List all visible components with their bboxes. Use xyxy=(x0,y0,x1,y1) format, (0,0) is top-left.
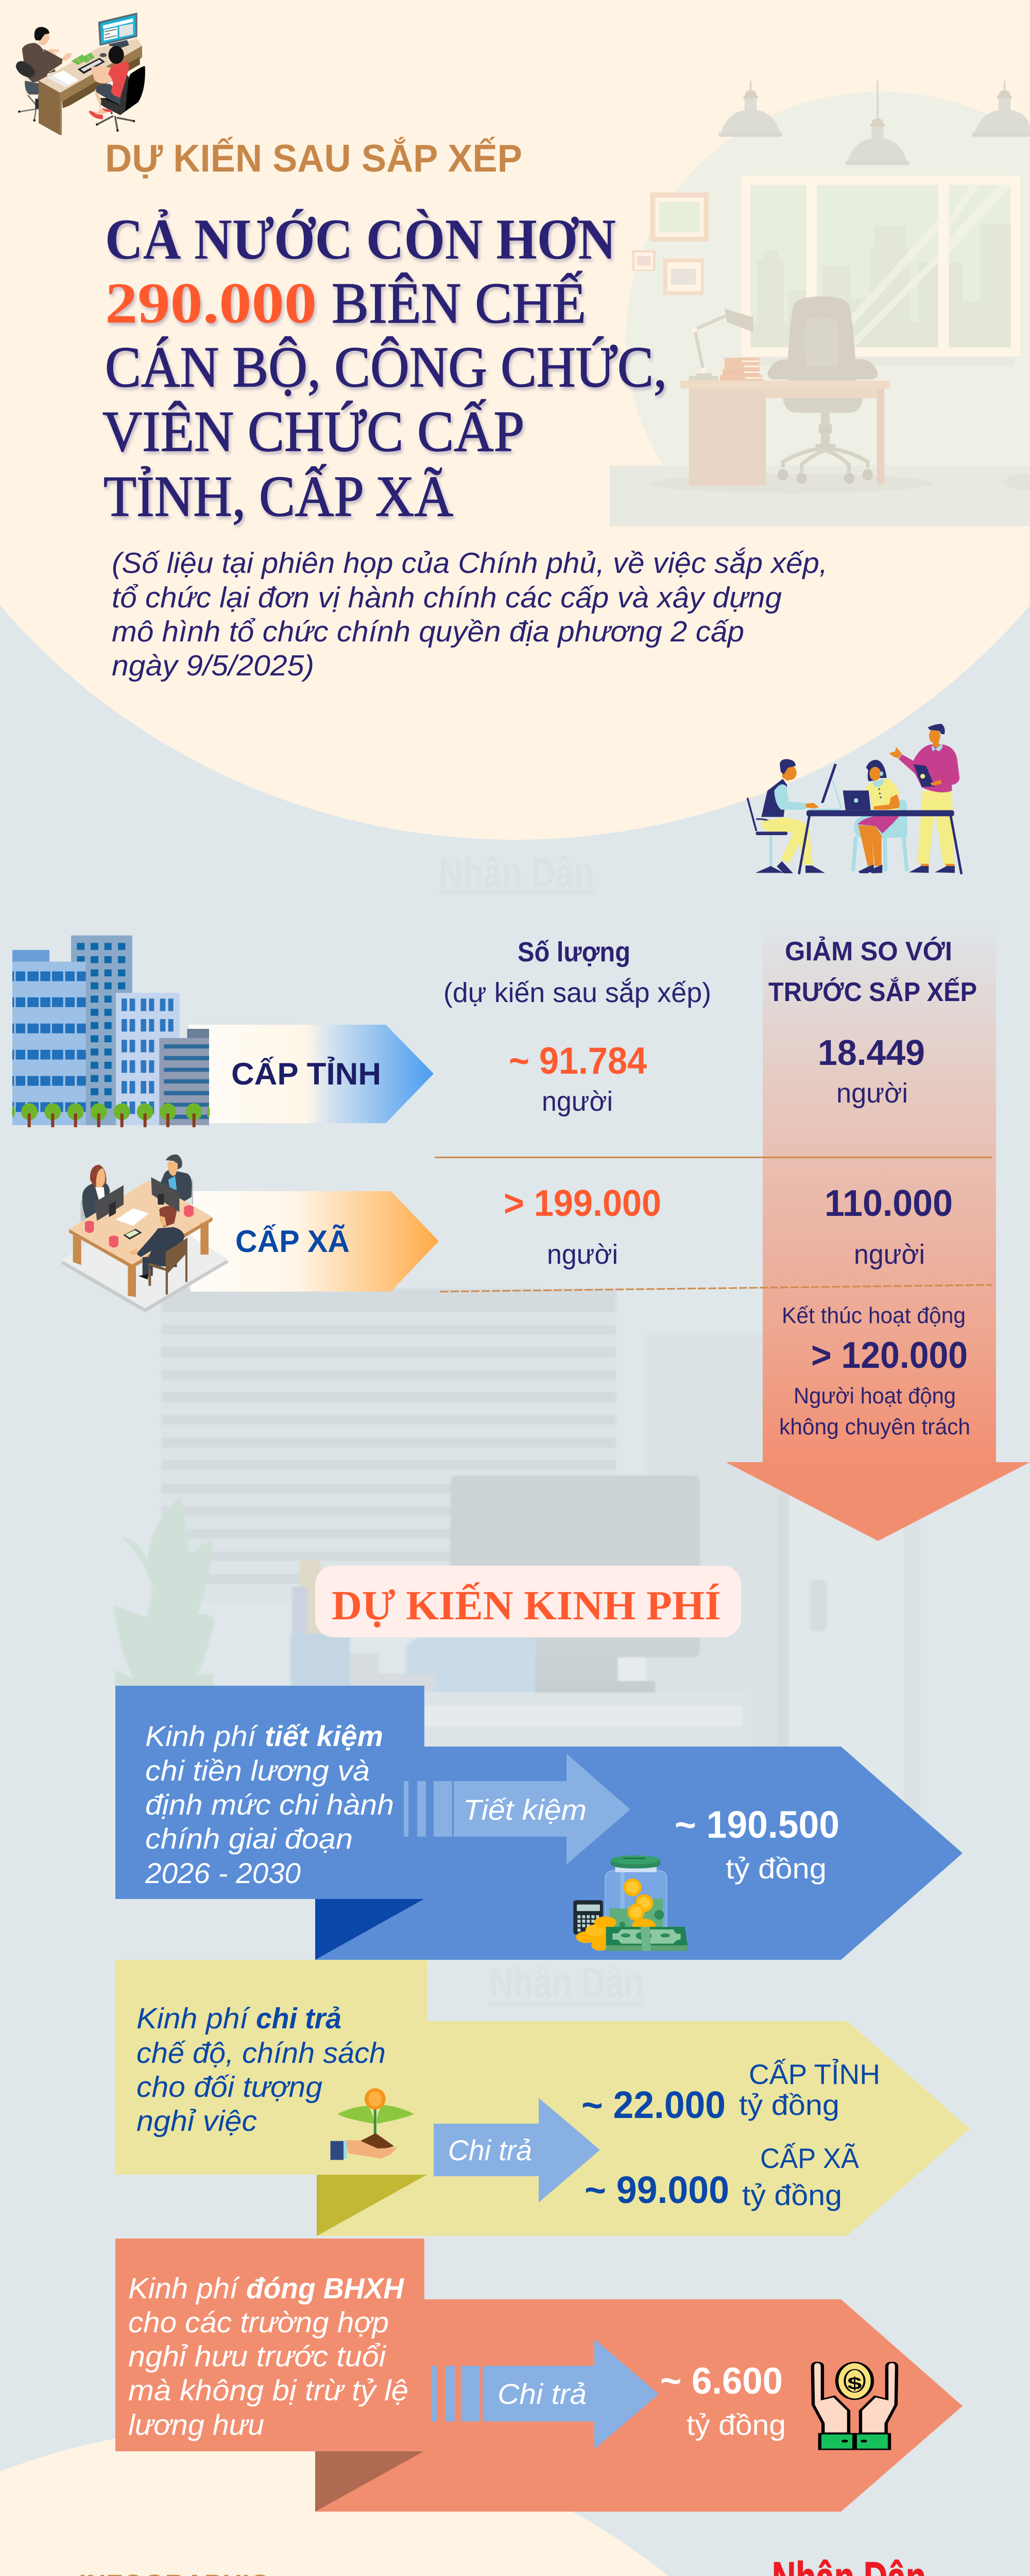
column header: decrease: TRƯỚC SẮP XẾP xyxy=(768,977,977,1007)
stat: provincial count: người xyxy=(542,1086,613,1117)
title: 290.000 xyxy=(105,272,317,335)
payout description: cho đối tượng xyxy=(136,2071,322,2104)
bottom cream shape xyxy=(0,2427,755,2576)
stat: provincial decrease xyxy=(818,1032,925,1109)
insurance description: Kinh phí xyxy=(128,2272,241,2305)
savings description: 2026 - 2030 xyxy=(145,1857,301,1889)
stat: ended activity: Người hoạt động xyxy=(794,1383,956,1409)
subtitle note: ngày 9/5/2025) xyxy=(112,649,314,682)
icon: savings jar xyxy=(573,1855,688,1951)
payout amounts xyxy=(581,2058,880,2211)
payout description: Kinh phí xyxy=(136,2002,251,2035)
savings description: tiết kiệm xyxy=(265,1720,383,1752)
arrow: insurance xyxy=(432,2339,659,2449)
stat: commune count xyxy=(504,1183,661,1270)
insurance amount: tỷ đồng xyxy=(686,2409,786,2441)
stat: commune decrease: 110.000 xyxy=(825,1183,953,1224)
savings description: Kinh phí xyxy=(145,1720,259,1752)
icon: hands holding coin: $ xyxy=(847,2375,862,2393)
savings amount: ~ 190.500 xyxy=(675,1803,839,1846)
arrow: provincial level xyxy=(188,1025,434,1123)
payout amounts: tỷ đồng xyxy=(742,2179,842,2211)
arrow: payout xyxy=(434,2098,600,2202)
title: CẢ NƯỚC CÒN HƠN xyxy=(105,208,616,272)
arrow: savings xyxy=(404,1754,630,1865)
insurance amount xyxy=(660,2361,786,2441)
stat: provincial count: ~ 91.784 xyxy=(509,1040,647,1082)
stat: commune decrease xyxy=(825,1183,953,1270)
dashed divider xyxy=(440,1285,992,1292)
savings amount: tỷ đồng xyxy=(726,1852,827,1885)
payout amounts: tỷ đồng xyxy=(739,2089,839,2121)
top cream shape xyxy=(0,0,1030,840)
payout amounts: CẤP XÃ xyxy=(760,2142,859,2174)
savings description: chi tiền lương và xyxy=(145,1754,370,1787)
insurance amount: ~ 6.600 xyxy=(660,2361,783,2402)
insurance description: đóng BHXH xyxy=(246,2272,405,2305)
stat: provincial decrease: 18.449 xyxy=(818,1032,925,1073)
subtitle note: mô hình tổ chức chính quyền địa phương 2 cấp xyxy=(112,615,744,648)
insurance description: cho các trường hợp xyxy=(128,2306,389,2339)
subtitle note: (Số liệu tại phiên họp của Chính phủ, về việc sắp xếp, xyxy=(112,547,828,580)
subtitle note xyxy=(112,547,828,682)
column header: quantity: Số lượng xyxy=(518,937,630,968)
savings description: chính giai đoạn xyxy=(145,1822,353,1855)
insurance description: nghỉ hưu trước tuổi xyxy=(128,2340,386,2373)
arrow: commune level xyxy=(191,1191,439,1292)
arrow label: Tiết kiệm xyxy=(463,1793,587,1826)
icon: hands holding coin xyxy=(813,2363,897,2449)
icon: plant in hand xyxy=(331,2088,414,2160)
icon: meeting table xyxy=(60,1155,229,1313)
title: BIÊN CHẾ xyxy=(332,271,586,335)
panel: social insurance xyxy=(115,2239,963,2512)
arrow label: Chi trả xyxy=(448,2134,532,2166)
insurance description: mà không bị trừ tỷ lệ xyxy=(128,2374,408,2407)
column header: decrease: GIẢM SO VỚI xyxy=(785,936,952,967)
insurance description xyxy=(128,2272,408,2442)
section heading: budget xyxy=(315,1566,741,1637)
label: provincial level: CẤP TỈNH xyxy=(231,1057,381,1091)
payout description: nghỉ việc xyxy=(136,2105,257,2138)
payout amounts: ~ 22.000 xyxy=(581,2083,726,2126)
arrow label: Chi trả xyxy=(497,2378,587,2410)
stat: commune count: người xyxy=(547,1239,618,1270)
column header: quantity: (dự kiến sau sắp xếp) xyxy=(443,977,711,1008)
payout description: chế độ, chính sách xyxy=(136,2037,386,2070)
column header: decrease xyxy=(768,936,977,1007)
icon: two people at a desk xyxy=(16,12,145,135)
stat: provincial decrease: người xyxy=(836,1078,908,1109)
insurance description: lương hưu xyxy=(128,2409,264,2442)
stat: provincial count xyxy=(509,1040,647,1117)
payout description: chi trả xyxy=(256,2002,341,2035)
watermark: Nhân Dân xyxy=(439,850,594,896)
label: commune level: CẤP XÃ xyxy=(235,1224,350,1259)
section heading: budget: DỰ KIẾN KINH PHÍ xyxy=(332,1582,721,1629)
icon: team at a table xyxy=(748,724,962,873)
column header: quantity xyxy=(443,937,711,1008)
title: TỈNH, CẤP XÃ xyxy=(104,464,453,529)
subtitle note: tổ chức lại đơn vị hành chính các cấp và xây dựng xyxy=(112,581,782,614)
title xyxy=(102,208,667,529)
illustration: blurred office backdrop xyxy=(113,1289,920,1811)
stat: ended activity: > 120.000 xyxy=(811,1335,968,1376)
payout amounts: ~ 99.000 xyxy=(585,2168,729,2211)
payout description xyxy=(136,2002,386,2138)
payout amounts: CẤP TỈNH xyxy=(749,2058,880,2090)
savings description xyxy=(145,1720,394,1889)
illustration: faded office backdrop xyxy=(610,81,1030,527)
panel: savings xyxy=(115,1686,963,1960)
stat: commune decrease: người xyxy=(854,1239,925,1270)
stat: ended activity: Kết thúc hoạt động xyxy=(782,1303,966,1328)
title: CÁN BỘ, CÔNG CHỨC, xyxy=(105,335,667,399)
title: VIÊN CHỨC CẤP xyxy=(102,399,524,464)
panel: payout xyxy=(115,1960,970,2236)
divider xyxy=(435,1157,992,1158)
icon: city buildings xyxy=(12,936,210,1127)
stat: ended activity: không chuyên trách xyxy=(779,1414,970,1439)
heading: kicker: DỰ KIẾN SAU SẮP XẾP xyxy=(105,137,522,180)
watermark: Nhân Dân xyxy=(489,1959,644,2006)
stat: commune count: > 199.000 xyxy=(504,1183,661,1224)
arrow: decrease compared with before xyxy=(726,922,1030,1541)
stat: ended activity xyxy=(779,1303,970,1439)
savings description: định mức chi hành xyxy=(145,1788,394,1821)
savings amount xyxy=(675,1803,839,1885)
